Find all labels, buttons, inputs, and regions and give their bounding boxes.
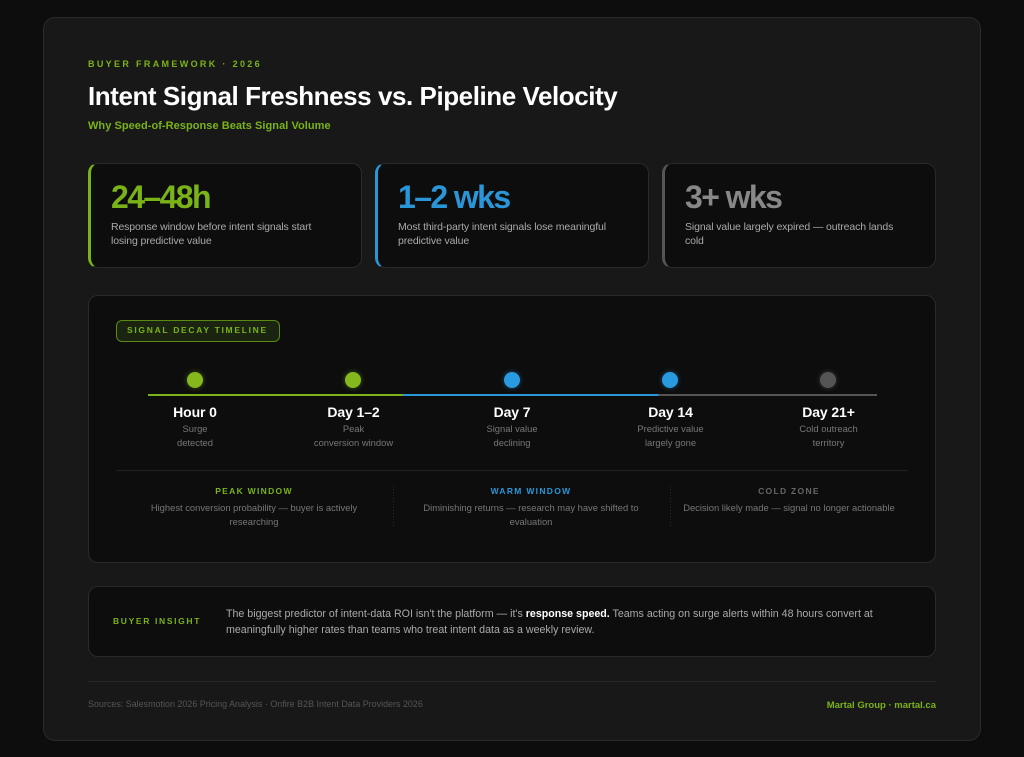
step: Day 1–2: Peak — [343, 423, 364, 434]
step: Day 21+: Cold outreach — [799, 423, 858, 434]
zone: warm window — [423, 486, 639, 526]
step: Day 14: Predictive value — [637, 423, 704, 434]
step: Day 21+: territory — [813, 436, 844, 448]
timeline heading badge: SIGNAL DECAY TIMELINE — [127, 325, 268, 335]
step: Day 14: Day 14 — [648, 404, 693, 420]
title: Intent Signal Freshness vs. Pipeline Velocity — [88, 81, 617, 111]
marker: Hour 0 — [187, 372, 203, 388]
step: Day 7 — [486, 404, 538, 448]
step: Day 7: declining — [493, 436, 530, 448]
step: Day 14: largely gone — [645, 436, 696, 448]
step: Hour 0: Surge — [182, 423, 208, 434]
marker: Day 7 — [504, 372, 520, 388]
subtitle: Why Speed-of-Response Beats Signal Volume — [88, 120, 331, 132]
marker: Day 1–2 — [345, 372, 361, 388]
step: Day 21+: Day 21+ — [802, 404, 855, 420]
stat card: 24–48h — [88, 163, 362, 268]
stat description: Response window before intent signals start losing predictive value — [111, 220, 311, 247]
step: Day 1–2: Day 1–2 — [327, 404, 380, 420]
zone: cold zone: Decision likely made — signal no longer actionable — [683, 502, 895, 512]
zone: peak window — [151, 486, 358, 527]
step: Day 7: Signal value — [486, 423, 538, 434]
insight label: BUYER INSIGHT — [113, 616, 201, 626]
step: Hour 0 — [173, 404, 217, 448]
step: Day 7: Day 7 — [494, 404, 530, 420]
panel: buyer insight — [88, 586, 936, 657]
zone: peak window: PEAK WINDOW — [215, 486, 293, 496]
zone: peak window: Highest conversion probability — buyer is actively researching — [151, 502, 357, 526]
marker: Day 21+ — [820, 372, 836, 388]
stat description: Most third-party intent signals lose meaningful predictive value — [398, 220, 606, 247]
zone: warm window: WARM WINDOW — [491, 486, 571, 496]
timeline heading badge — [116, 320, 280, 342]
panel: signal decay timeline — [88, 295, 936, 563]
stat value: 24–48h — [111, 179, 210, 215]
zone: cold zone: COLD ZONE — [758, 486, 820, 496]
eyebrow: BUYER FRAMEWORK · 2026 — [88, 59, 262, 69]
stat card: 1–2 wks — [375, 163, 649, 268]
stat card: 3+ wks — [662, 163, 936, 268]
footer brand: Martal Group · martal.ca — [827, 700, 936, 711]
zone: cold zone — [683, 486, 895, 513]
stat value: 3+ wks — [685, 179, 781, 215]
step: Day 1–2: conversion window — [314, 436, 393, 448]
step: Day 1–2 — [314, 404, 394, 448]
zone: warm window: Diminishing returns — research may have shifted to evaluation — [423, 502, 639, 526]
stat description: Signal value largely expired — outreach lands cold — [685, 220, 893, 247]
insight text: The biggest predictor of intent-data ROI isn't the platform — it's response speed. Teams acting on surge alerts within 48 hours convert at meaningfully higher rates than teams who treat intent data as a weekly review. — [226, 608, 873, 636]
marker: Day 14 — [662, 372, 678, 388]
footer sources: Sources: Salesmotion 2026 Pricing Analysis · Onfire B2B Intent Data Providers 2026 — [88, 699, 423, 709]
timeline track — [148, 394, 877, 396]
step: Hour 0: Hour 0 — [173, 404, 217, 420]
step: Hour 0: detected — [177, 436, 213, 448]
step: Day 14 — [637, 404, 704, 448]
stat value: 1–2 wks — [398, 179, 510, 215]
step: Day 21+ — [799, 404, 858, 448]
